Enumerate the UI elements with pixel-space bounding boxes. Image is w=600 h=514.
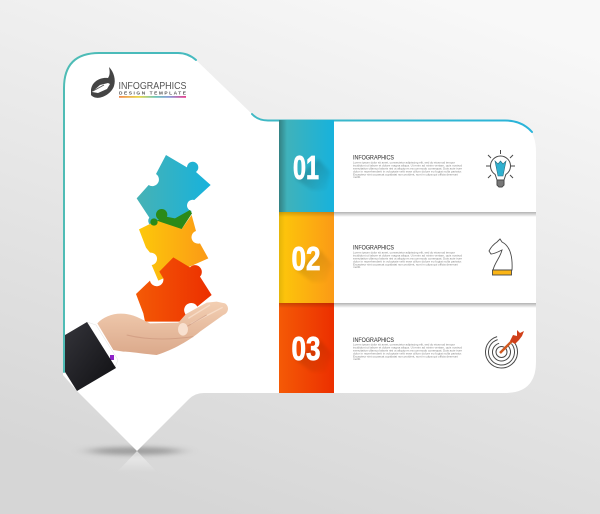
body 2 — [353, 250, 462, 269]
number 3: 03 — [292, 330, 320, 367]
band shade 2 — [279, 212, 285, 303]
body 2: mollit. — [353, 265, 361, 269]
thumbnail — [178, 323, 188, 336]
main panel — [63, 52, 536, 451]
body 3: dolor in reprehenderit in voluptate velit esse cillum dolore eu fugiat nulla pariatur. — [353, 351, 462, 355]
number 2: 02 — [292, 240, 320, 277]
puzzle overlap: green — [150, 209, 192, 229]
heading 3: INFOGRAPHICS — [353, 337, 395, 344]
icon: target with dart — [479, 329, 524, 375]
body 1: Lorem ipsum dolor sit amet, consectetur adipiscing elit, sed do eiusmod tempor — [353, 160, 455, 164]
body 1: mollit. — [353, 175, 361, 179]
band top shadow 2 — [279, 212, 334, 217]
heading 1: INFOGRAPHICS — [353, 154, 395, 162]
step 2 — [279, 212, 536, 308]
body 3 — [353, 342, 462, 361]
body 2: Lorem ipsum dolor sit amet, consectetur adipiscing elit, sed do eiusmod tempor — [353, 250, 455, 254]
body 1: dolor in reprehenderit in voluptate velit esse cillum dolore eu fugiat nulla pariatur. — [353, 169, 462, 173]
icon: chess knight — [489, 239, 512, 275]
body 2: Excepteur sint occaecat cupidatat non proident, sunt in culpa qui officia deserunt — [353, 262, 458, 266]
puzzle stack — [136, 155, 212, 322]
puzzle piece: amber — [139, 215, 208, 281]
sleeve — [65, 322, 116, 391]
band top shadow 3 — [279, 303, 334, 308]
teal panel edge — [64, 53, 532, 372]
body 2: exercitation ullamco laboris nisi ut aliquip ex ea commodo consequat. Duis aute irure — [353, 256, 462, 260]
color band 2 — [279, 212, 334, 303]
step 3 — [279, 303, 524, 393]
finger lines — [188, 305, 223, 324]
text block 3 — [353, 337, 462, 361]
shirt cuff — [87, 322, 118, 367]
band shade 1 — [279, 120, 287, 212]
logo rainbow bar — [119, 96, 186, 98]
body 3: Lorem ipsum dolor sit amet, consectetur adipiscing elit, sed do eiusmod tempor — [353, 342, 455, 346]
body 1: Excepteur sint occaecat cupidatat non proident, sunt in culpa qui officia deserunt — [353, 172, 458, 176]
body 1: exercitation ullamco laboris nisi ut aliquip ex ea commodo consequat. Duis aute irure — [353, 166, 462, 170]
logo mark — [91, 67, 115, 98]
text block 2 — [353, 244, 462, 269]
palm crease — [127, 315, 207, 339]
card 2 bottom shadow — [334, 303, 536, 308]
body 1 — [353, 160, 462, 179]
number shadow 1 — [296, 159, 330, 190]
number 1: 01 — [293, 149, 319, 186]
heading 2: INFOGRAPHICS — [353, 244, 395, 252]
body 3: mollit. — [353, 357, 361, 361]
number shadow 3 — [296, 340, 332, 372]
icon: light bulb — [486, 150, 515, 187]
body 3: exercitation ullamco laboris nisi ut aliquip ex ea commodo consequat. Duis aute irure — [353, 348, 462, 352]
logo title: INFOGRAPHICS — [118, 80, 186, 92]
puzzle piece: blue — [137, 155, 211, 229]
card 1 bottom shadow — [334, 212, 536, 217]
logo subtitle: DESIGN TEMPLATE — [119, 90, 187, 96]
tip shadow — [89, 447, 181, 472]
body 2: incididunt ut labore et dolore magna aliqua. Ut enim ad minim veniam, quis nostrud — [353, 254, 462, 258]
puzzle and hand illustration — [65, 155, 228, 391]
body 3: incididunt ut labore et dolore magna aliqua. Ut enim ad minim veniam, quis nostrud — [353, 346, 462, 350]
cufflink — [110, 355, 114, 360]
color band 1 — [279, 120, 334, 212]
number shadow 2 — [296, 250, 332, 282]
hand — [97, 302, 228, 355]
text block 1 — [353, 154, 462, 179]
step 1 — [279, 120, 536, 217]
body 3: Excepteur sint occaecat cupidatat non proident, sunt in culpa qui officia deserunt — [353, 354, 458, 358]
body 1: incididunt ut labore et dolore magna aliqua. Ut enim ad minim veniam, quis nostrud — [353, 164, 462, 168]
logo — [91, 67, 187, 98]
body 2: dolor in reprehenderit in voluptate velit esse cillum dolore eu fugiat nulla pariatur. — [353, 259, 462, 263]
color band 3 — [279, 303, 334, 393]
puzzle piece: red — [136, 257, 212, 322]
palm and fingers — [97, 302, 228, 355]
